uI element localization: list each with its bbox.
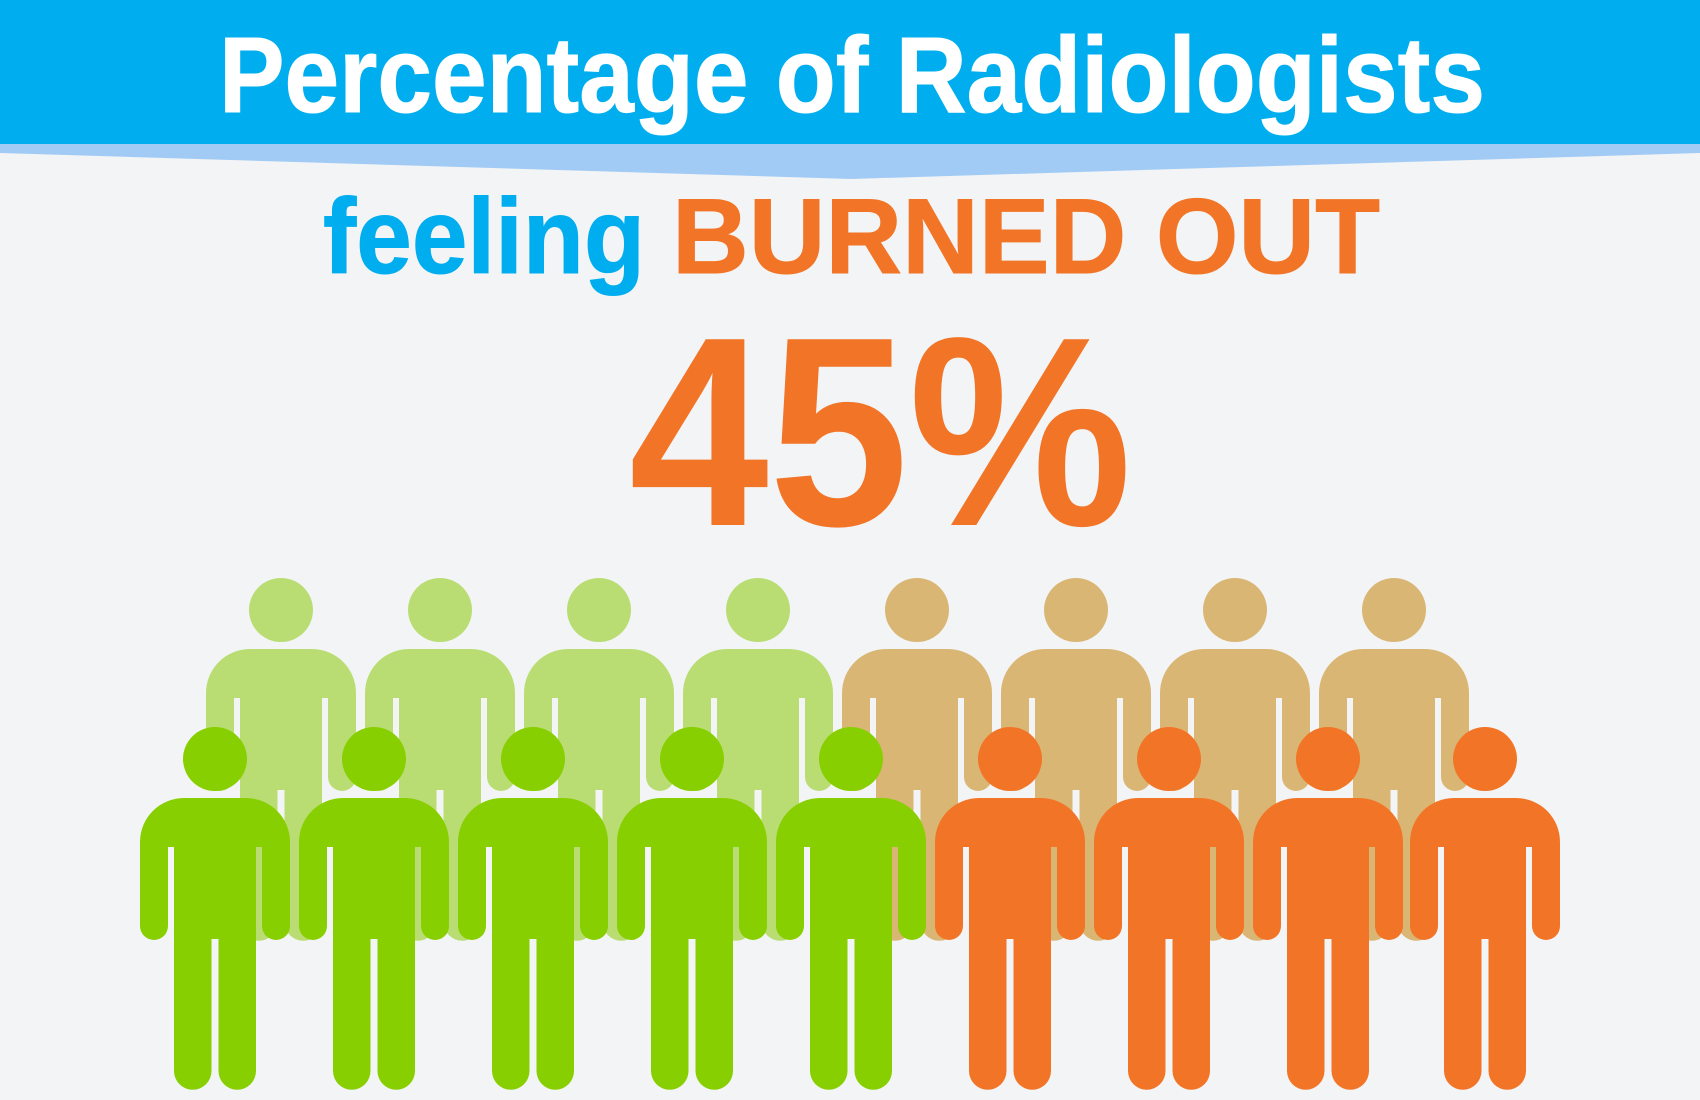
header bar <box>0 0 1700 144</box>
person: back row, green 3 <box>524 578 674 941</box>
subtitle: feeling: feeling <box>323 176 645 296</box>
person: front row, green 5 <box>776 727 926 1090</box>
subtitle: burned out: BURNED OUT <box>672 176 1380 296</box>
person: front row, orange 4 <box>1410 727 1560 1090</box>
person: front row, green 1 <box>140 727 290 1090</box>
back row of people <box>206 578 1469 941</box>
person: front row, orange 1 <box>935 727 1085 1090</box>
person: back row, green 2 <box>365 578 515 941</box>
person: back row, green 1 <box>206 578 356 941</box>
front row of people <box>140 727 1560 1090</box>
person: front row, green 3 <box>458 727 608 1090</box>
person: front row, green 2 <box>299 727 449 1090</box>
person: back row, tan 1 <box>842 578 992 941</box>
person: front row, green 4 <box>617 727 767 1090</box>
person: back row, green 4 <box>683 578 833 941</box>
person: back row, tan 4 <box>1319 578 1469 941</box>
title: Percentage of Radiologists <box>219 14 1485 135</box>
person: front row, orange 2 <box>1094 727 1244 1090</box>
person: back row, tan 2 <box>1001 578 1151 941</box>
header chevron band <box>0 144 1700 179</box>
person: front row, orange 3 <box>1253 727 1403 1090</box>
statistic: 45%: 45% <box>629 282 1132 583</box>
person: back row, tan 3 <box>1160 578 1310 941</box>
